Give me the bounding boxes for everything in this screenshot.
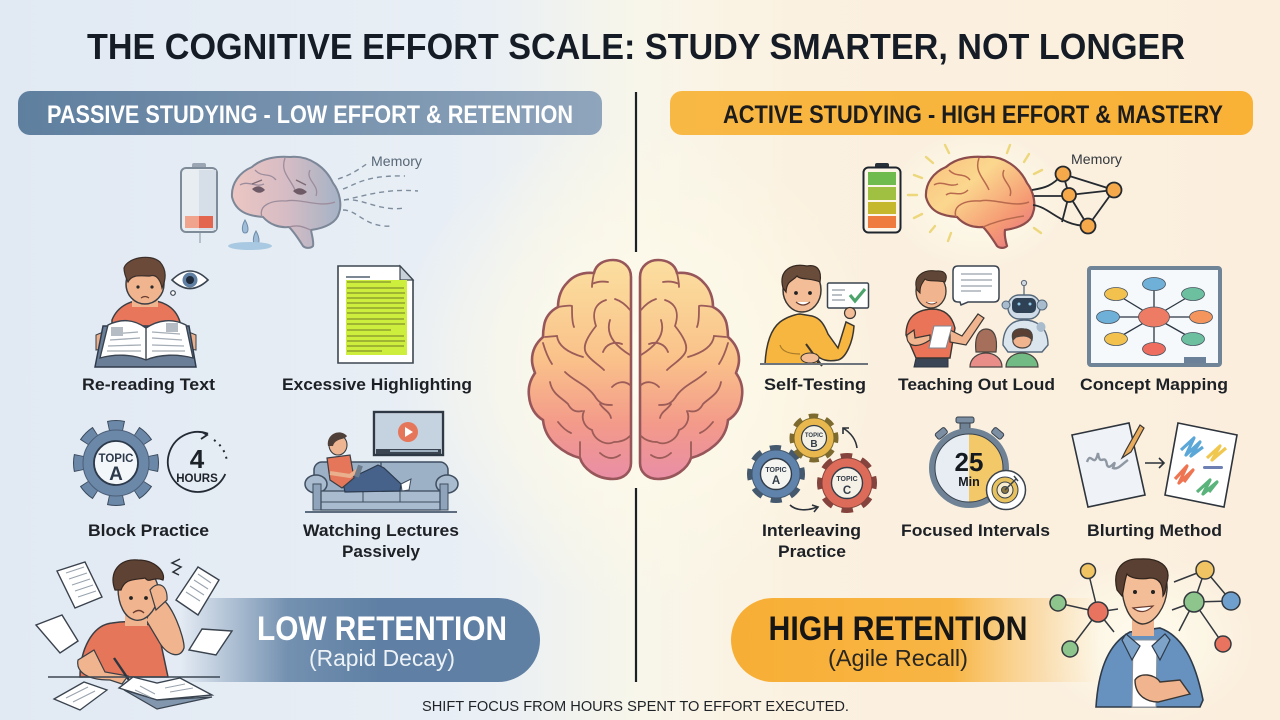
memory label: Memory (1071, 152, 1122, 167)
item: blurting method (1072, 423, 1237, 540)
item: watching lectures passively (303, 412, 459, 561)
gear: topic C (822, 458, 872, 508)
icon: low battery (181, 163, 217, 243)
callout: high retention: HIGH RETENTION (768, 610, 1028, 648)
speech bubble (953, 266, 999, 305)
item: watching lectures passively: Passively (342, 542, 421, 561)
item: block practice (79, 426, 228, 540)
gear: topic B (794, 418, 834, 458)
audience (970, 329, 1038, 367)
icon: energized brain with memory network (908, 145, 1122, 248)
icon: four hours clock: HOURS (176, 473, 218, 485)
callout: low retention: (Rapid Decay) (309, 645, 455, 671)
cycle arrows (790, 428, 857, 512)
icon: four hours clock: 4 (190, 444, 205, 474)
item: block practice: Block Practice (88, 521, 209, 540)
item: watching lectures passively: Watching Lectures (303, 521, 459, 540)
gear: topic C: C (843, 485, 851, 497)
item: self-testing (760, 265, 868, 394)
item: interleaving practice (752, 418, 872, 561)
icon: tv (374, 412, 443, 455)
active heading (670, 91, 1253, 135)
footer takeaway: SHIFT FOCUS FROM HOURS SPENT TO EFFORT EXECUTED. (422, 698, 849, 715)
icon: stopwatch 25 min: 25 (955, 447, 983, 477)
callout: high retention: (Agile Recall) (828, 645, 968, 671)
item: teaching out loud: Teaching Out Loud (898, 375, 1055, 394)
robot (1002, 280, 1048, 352)
icon: target (986, 470, 1026, 510)
item: re-reading text (82, 257, 215, 394)
item: teaching out loud (898, 266, 1055, 394)
gear: topic A: A (772, 475, 780, 487)
item: self-testing: Self-Testing (764, 375, 866, 394)
panel: active studying (422, 91, 1253, 715)
central brain illustration (529, 260, 742, 479)
callout: low retention (180, 598, 540, 682)
item: interleaving practice: Interleaving (762, 521, 861, 540)
passive heading (18, 91, 602, 135)
item: re-reading text: Re-reading Text (82, 375, 215, 394)
right hemisphere (640, 260, 742, 479)
item: focused intervals (901, 417, 1050, 540)
icon: stressed student (36, 559, 232, 710)
item: concept mapping (1080, 268, 1228, 394)
active heading: ACTIVE STUDYING - HIGH EFFORT & MASTERY (723, 101, 1223, 129)
item: concept mapping: Concept Mapping (1080, 375, 1228, 394)
icon: sofa and viewer (305, 432, 458, 512)
icon: stopwatch 25 min (932, 417, 1006, 505)
icon: eye (171, 271, 208, 295)
center divider (635, 92, 637, 682)
item: blurting method: Blurting Method (1087, 521, 1222, 540)
icon: topic A gear: TOPIC (99, 453, 133, 465)
icon: topic A gear (79, 426, 153, 500)
item: excessive highlighting: Excessive Highlighting (282, 375, 472, 394)
icon: scribble page (1072, 423, 1145, 507)
passive heading: PASSIVE STUDYING - LOW EFFORT & RETENTION (47, 101, 573, 129)
item: excessive highlighting (282, 266, 472, 394)
icon: stopwatch 25 min: Min (958, 475, 980, 489)
panel: passive studying (18, 91, 602, 710)
gear: topic C: TOPIC (836, 476, 858, 483)
left hemisphere (529, 260, 631, 479)
item: focused intervals: Focused Intervals (901, 521, 1050, 540)
icon: topic A gear: A (109, 464, 123, 485)
icon: four hours clock (166, 430, 228, 494)
icon: confident student with knowledge network (1050, 559, 1240, 707)
icon: full battery (864, 163, 900, 232)
arrow (1145, 458, 1164, 468)
memory label: Memory (371, 154, 422, 169)
item: interleaving practice: Practice (778, 542, 846, 561)
gear: topic A (752, 450, 800, 498)
title: THE COGNITIVE EFFORT SCALE: STUDY SMARTER, NOT LONGER (87, 26, 1185, 67)
gear: topic B: TOPIC (805, 433, 824, 439)
callout: high retention (731, 598, 1100, 682)
icon: sad brain with fading memory (228, 154, 422, 250)
icon: colored recall page (1165, 423, 1237, 507)
gear: topic B: B (810, 439, 818, 450)
callout: low retention: LOW RETENTION (257, 610, 507, 648)
gear: topic A: TOPIC (765, 467, 787, 474)
